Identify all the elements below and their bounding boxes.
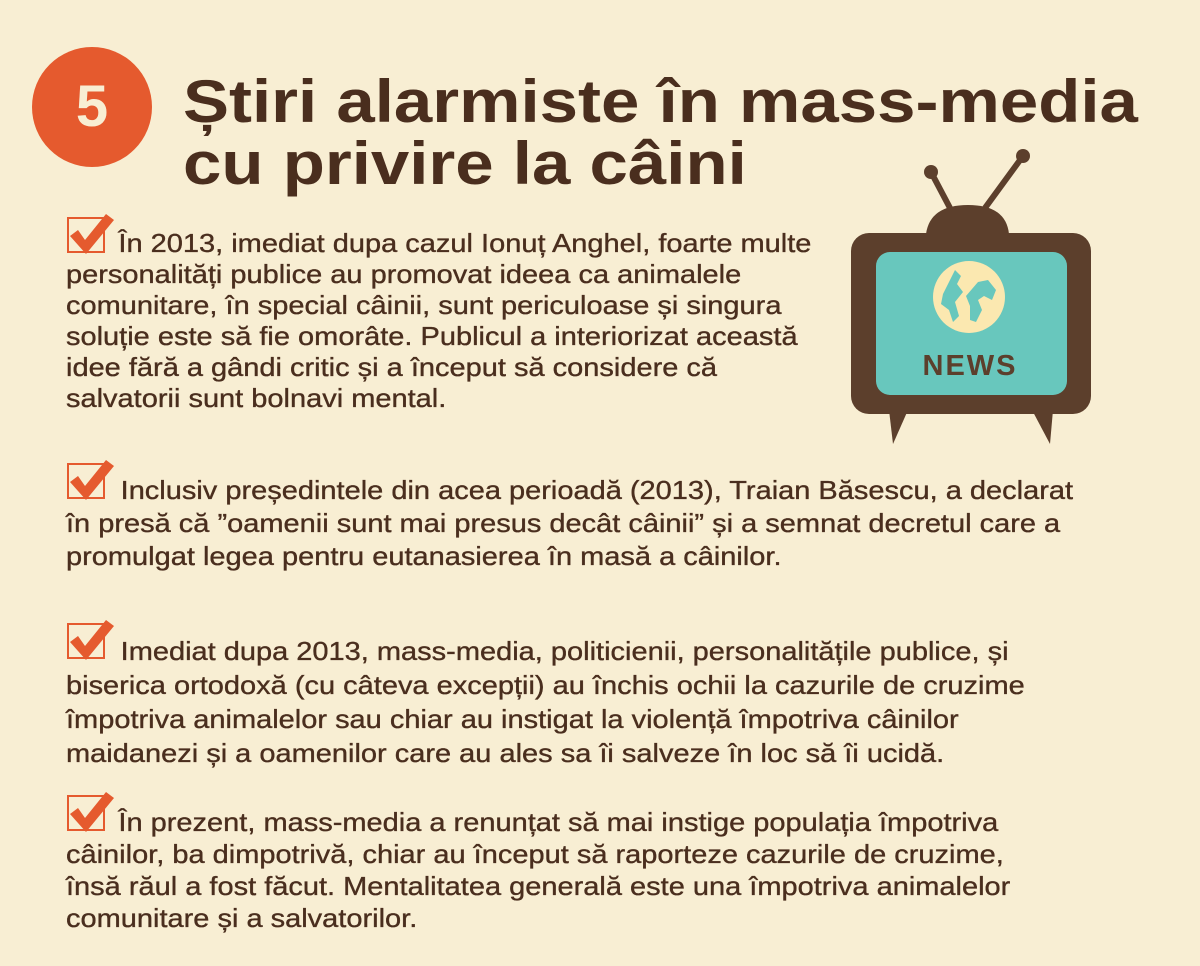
badge: number 5 (32, 47, 152, 167)
checkbox 2 (67, 460, 114, 500)
icon: TV news (851, 149, 1091, 444)
paragraph 3: biserica ortodoxă (cu câteva excepții) au închis ochii la cazurile de cruzime (66, 670, 1025, 700)
paragraph 4: comunitare și a salvatorilor. (66, 903, 417, 933)
icon: TV news: NEWS (922, 350, 1018, 382)
paragraph 1: salvatorii sunt bolnavi mental. (66, 383, 446, 413)
title (183, 68, 1138, 197)
paragraph 1: personalități publice au promovat ideea ca animalele (66, 259, 741, 289)
paragraph 3 (65, 636, 1025, 768)
paragraph 4: câinilor, ba dimpotrivă, chiar au început să raporteze cazurile de cruzime, (66, 839, 1004, 869)
badge: number 5: 5 (76, 74, 108, 139)
paragraph 1: comunitare, în special câinii, sunt periculoase și singura (66, 290, 781, 320)
paragraph 3: maidanezi și a oamenilor care au ales sa îi salveze în loc să îi ucidă. (66, 738, 944, 768)
paragraph 1: idee fără a gândi critic și a început să considere că (66, 352, 717, 382)
checkbox 1 (67, 214, 114, 254)
paragraph 2: promulgat legea pentru eutanasierea în masă a câinilor. (66, 541, 782, 571)
paragraph 4: În prezent, mass-media a renunțat să mai instige populația împotriva (118, 807, 998, 837)
paragraph 3: Imediat dupa 2013, mass-media, politicienii, personalitățile publice, și (121, 636, 1009, 666)
paragraph 3: împotriva animalelor sau chiar au instigat la violență împotriva câinilor (66, 704, 959, 734)
paragraph 4: însă răul a fost făcut. Mentalitatea generală este una împotriva animalelor (66, 871, 1010, 901)
title: Știri alarmiste în mass-media (183, 68, 1138, 135)
paragraph 1: În 2013, imediat dupa cazul Ionuț Anghel, foarte multe (118, 228, 811, 258)
paragraph 2 (65, 475, 1074, 571)
paragraph 2: Inclusiv președintele din acea perioadă (2013), Traian Băsescu, a declarat (121, 475, 1073, 505)
paragraph 2: în presă că ”oamenii sunt mai presus decât câinii” și a semnat decretul care a (66, 508, 1060, 538)
paragraph 1: soluție este să fie omorâte. Publicul a interiorizat această (66, 321, 798, 351)
checkbox 3 (67, 620, 114, 660)
paragraph 4 (65, 807, 1010, 933)
paragraph 1 (66, 228, 811, 413)
checkbox 4 (67, 792, 114, 832)
title: cu privire la câini (183, 130, 747, 197)
